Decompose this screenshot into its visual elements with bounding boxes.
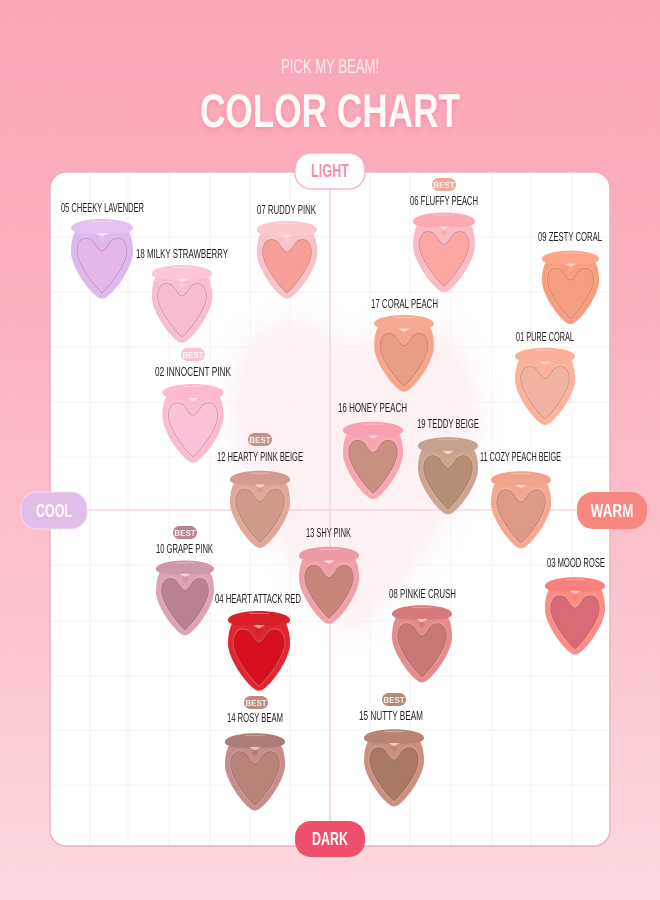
- axis label: light: [295, 153, 365, 189]
- swatch: 04 heart attack red: [215, 592, 301, 691]
- swatch: 02 innocent pink: [155, 348, 231, 463]
- swatch: 08 pinkie crush: 08 PINKIE CRUSH: [389, 587, 456, 601]
- axis label: dark: [295, 821, 365, 857]
- swatch: 02 innocent pink: 02 INNOCENT PINK: [155, 365, 231, 379]
- swatch: 06 fluffy peach: [410, 178, 478, 292]
- swatch: 12 hearty pink beige: [217, 433, 303, 548]
- best badge: BEST: [249, 436, 271, 445]
- swatch: 07 ruddy pink: [257, 203, 317, 299]
- swatch: 03 mood rose: 03 MOOD ROSE: [547, 556, 605, 570]
- axis label: warm: [577, 492, 647, 529]
- swatch: 11 cozy peach beige: 11 COZY PEACH BEIGE: [480, 450, 561, 464]
- swatch: 10 grape pink: 10 GRAPE PINK: [156, 542, 213, 556]
- best badge: BEST: [182, 351, 204, 360]
- swatch: 15 nutty beam: [359, 693, 424, 807]
- axis label: dark: DARK: [312, 829, 348, 849]
- background heart: [232, 321, 478, 635]
- swatch: 17 coral peach: 17 CORAL PEACH: [371, 297, 438, 311]
- swatch: 01 pure coral: 01 PURE CORAL: [516, 330, 574, 344]
- swatch: 14 rosy beam: 14 ROSY BEAM: [227, 711, 283, 725]
- axis label: warm: WARM: [590, 501, 634, 521]
- panel: chart: [50, 172, 610, 846]
- swatch: 18 milky strawberry: 18 MILKY STRAWBERRY: [136, 247, 228, 261]
- title: color chart: COLOR CHART: [200, 84, 460, 137]
- swatch: 05 cheeky lavender: 05 CHEEKY LAVENDER: [61, 201, 144, 215]
- best badge: BEST: [433, 181, 455, 190]
- swatch: 06 fluffy peach: 06 FLUFFY PEACH: [410, 194, 478, 208]
- swatch: 14 rosy beam: [225, 696, 285, 811]
- swatch: 03 mood rose: [545, 556, 605, 655]
- axis label: light: LIGHT: [311, 161, 349, 181]
- best badge: BEST: [245, 699, 267, 708]
- swatch: 19 teddy beige: [417, 417, 479, 515]
- swatch: 16 honey peach: [338, 401, 407, 499]
- swatch: 09 zesty coral: [538, 230, 602, 324]
- swatch: 07 ruddy pink: 07 RUDDY PINK: [257, 203, 316, 217]
- swatch: 18 milky strawberry: [136, 247, 228, 343]
- swatch: 01 pure coral: [515, 330, 575, 425]
- best badge: BEST: [174, 529, 196, 538]
- swatch: 12 hearty pink beige: 12 HEARTY PINK BEIGE: [217, 450, 303, 464]
- swatch: 15 nutty beam: 15 NUTTY BEAM: [359, 709, 423, 723]
- swatch: 10 grape pink: [156, 526, 214, 635]
- swatch: 11 cozy peach beige: [480, 450, 561, 549]
- swatch: 16 honey peach: 16 HONEY PEACH: [338, 401, 407, 415]
- swatch: 13 shy pink: 13 SHY PINK: [306, 526, 351, 540]
- best badge: BEST: [383, 696, 405, 705]
- swatch: 04 heart attack red: 04 HEART ATTACK RED: [215, 592, 301, 606]
- title: pick my beam: PICK MY BEAM!: [281, 56, 379, 78]
- swatch: 05 cheeky lavender: [61, 201, 144, 299]
- swatch: 13 shy pink: [299, 526, 359, 624]
- swatch: 09 zesty coral: 09 ZESTY CORAL: [538, 230, 602, 244]
- swatch: 19 teddy beige: 19 TEDDY BEIGE: [417, 417, 479, 431]
- swatch: 08 pinkie crush: [389, 587, 456, 683]
- swatch: 17 coral peach: [371, 297, 438, 392]
- axis label: cool: COOL: [36, 501, 72, 521]
- axis label: cool: [21, 492, 87, 529]
